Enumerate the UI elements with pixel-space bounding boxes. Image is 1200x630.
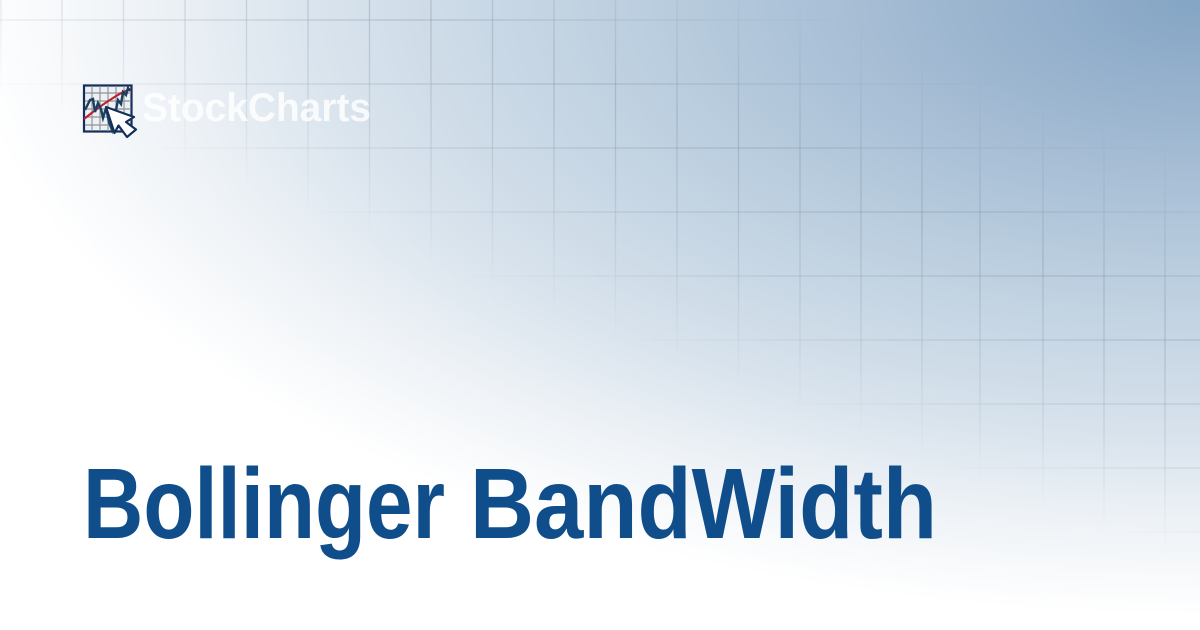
logo: StockCharts (84, 86, 371, 137)
title: Bollinger (83, 448, 445, 560)
icon: chart with cursor (84, 86, 136, 137)
logo wordmark: StockCharts (142, 86, 371, 130)
title: BandWidth (470, 448, 937, 560)
title (83, 448, 937, 560)
